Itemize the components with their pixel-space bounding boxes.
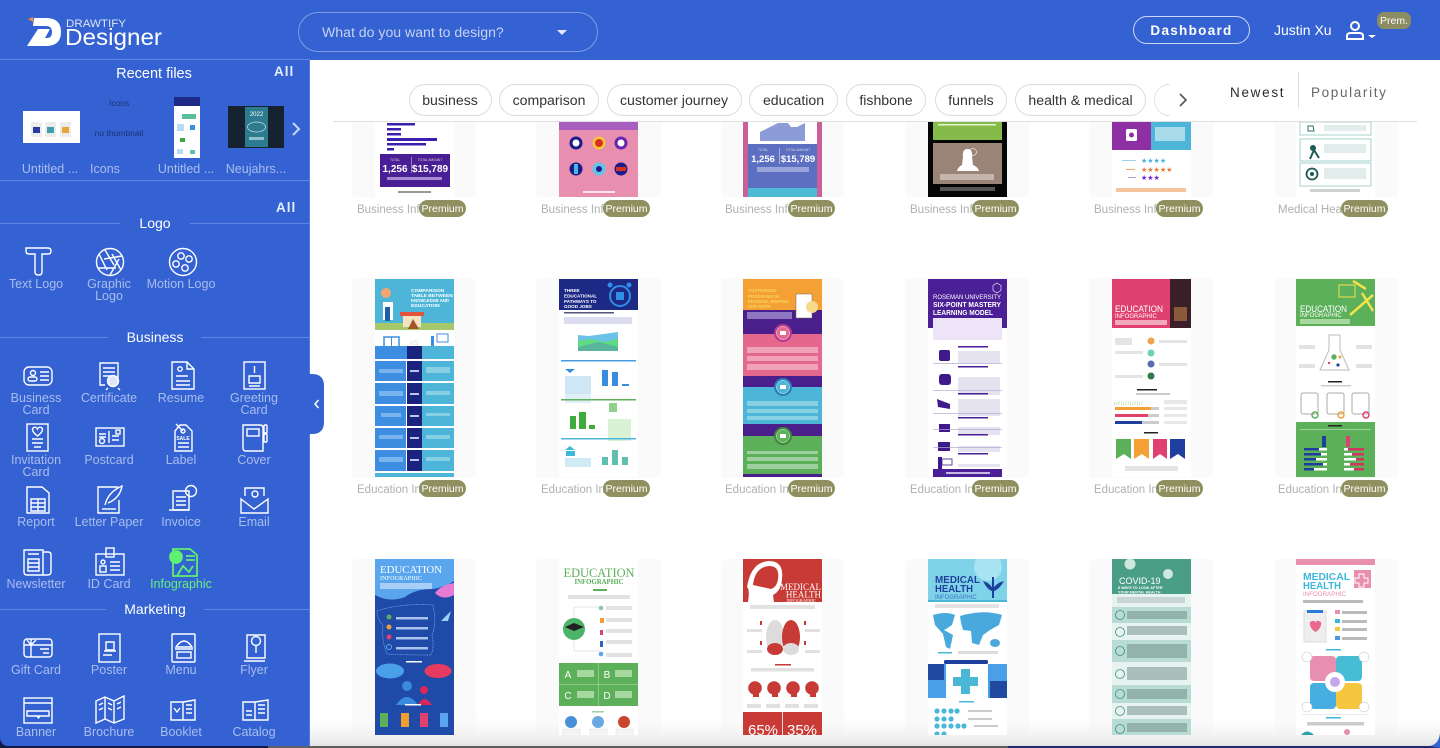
captions row 2: Premium: [605, 483, 648, 495]
thumbnail: comparison table: KNOWLEDGE AND: [411, 298, 449, 304]
tag pills: funnels: [948, 92, 994, 108]
icon: invoice: [169, 486, 196, 510]
thumbnail: medical health pink: HEALTH: [1303, 581, 1341, 592]
search box: [298, 12, 598, 52]
premium badge: Prem.: [1380, 15, 1408, 27]
captions row 1: [357, 200, 1388, 217]
label: booklet: Booklet: [160, 725, 202, 739]
captions row 1: Business Info: [357, 204, 426, 216]
thumbnail: business bars: TOTAL: [390, 158, 400, 162]
thumbnail: comparison table: [375, 279, 454, 477]
label: resume: Resume: [158, 391, 204, 405]
thumbnail: education infographic pink: INFOGRAPHIC: [1115, 314, 1157, 320]
captions row 2: Education In: [357, 484, 421, 496]
sort options: [1230, 72, 1388, 108]
thumbnail: comparison table: EDUCATION: [411, 303, 440, 309]
thumbnail: education infographic green on white: D: [603, 691, 611, 702]
bottom fade: [310, 713, 1440, 746]
label: sale tag text: SALE: [176, 436, 190, 442]
icon: postcard: [96, 428, 124, 446]
thumbnail: three pathways: GOOD JOBS: [564, 304, 592, 309]
thumbnail: education infographic pink: /////////////: [1114, 401, 1144, 406]
tag pills: business: [422, 92, 478, 108]
captions row 1: Premium: [1158, 203, 1201, 215]
tag pills: education: [763, 92, 824, 108]
label: infographic: Infographic: [150, 577, 212, 591]
thumbnail: medical health pink: [1296, 559, 1375, 735]
thumbnail: education infographic green on white: B: [604, 670, 611, 681]
icon: booklet: [171, 700, 195, 720]
dashboard button: [1134, 16, 1250, 44]
tag pills: fishbone: [859, 92, 913, 108]
captions row 1: Business Info: [910, 204, 979, 216]
label: business card: Business: [11, 391, 61, 405]
recent thumb 1: [23, 111, 80, 143]
thumbnail: education infographic green: [1296, 279, 1375, 477]
captions row 2: Premium: [1158, 483, 1201, 495]
thumbnail: black and brown: [928, 122, 1007, 197]
thumbnail: blue totals: TOTAL: [758, 148, 768, 152]
icon: motion logo: [170, 248, 196, 276]
icon: user: [1347, 22, 1376, 39]
label: invoice: Invoice: [161, 515, 201, 529]
thumbnail: comparison table: TABLE BETWEEN: [411, 293, 453, 299]
captions row 1: Premium: [421, 203, 464, 215]
thumbnail: medical health red: HEALTH: [786, 590, 821, 600]
thumbnail: blue totals: $15,789: [781, 154, 815, 165]
thumbnail: medical health red: 65%: [748, 722, 778, 739]
thumbnail: education infographic navy: [375, 559, 454, 735]
panel: template gallery row 3: [375, 553, 1375, 739]
thumbnail: medical health red: INFOGRAPHIC: [786, 598, 816, 603]
label: flyer: Flyer: [240, 663, 268, 677]
thumbnail: Roseman University: LEARNING MODEL: [933, 308, 994, 317]
icon: menu: [172, 634, 195, 662]
captions row 1: Premium: [790, 203, 833, 215]
thumbnail: medical health pink: INFOGRAPHIC: [1303, 591, 1347, 598]
thumbnail: blue totals: [743, 122, 822, 197]
thumbnail: customized programs: CUSTOMIZED: [748, 288, 776, 293]
captions row 2: Premium: [421, 483, 464, 495]
thumbnail: education infographic green on white: C: [564, 691, 572, 702]
section: business: [0, 329, 309, 591]
label: poster: Poster: [91, 663, 127, 677]
label: brochure: Brochure: [84, 725, 134, 739]
thumbnail: shopping stars: ★★★★: [1141, 157, 1166, 165]
thumbnail: covid-19: 8 WAYS TO LOOK AFTER: [1118, 586, 1163, 590]
thumbnail: three pathways: EDUCATIONAL: [564, 294, 597, 298]
recent captions: Neujahrs...: [226, 162, 286, 176]
thumbnail: medical health red: [743, 559, 822, 739]
logo: Designer: [65, 24, 162, 50]
recent captions: Untitled ...: [158, 162, 214, 176]
thumbnail: education infographic navy: INFOGRAPHIC: [380, 576, 422, 582]
recent thumb 2 placeholder: no thumbnail: [95, 128, 143, 138]
thumbnail: education infographic green on white: A: [565, 670, 572, 681]
recent thumb 4: 2022: [250, 112, 264, 118]
label: email: Email: [238, 515, 270, 529]
thumbnail: covid-19: YOUR MENTAL HEALTH: [1118, 590, 1161, 594]
icon: text logo: [26, 248, 51, 275]
panel: template gallery row 1: [380, 122, 1372, 197]
captions row 2: Education In: [910, 484, 974, 496]
recent files section: [0, 64, 309, 181]
thumbnail: business bars: 1,256: [382, 164, 408, 175]
row 3 card backgrounds: [352, 559, 1398, 735]
thumbnail: education infographic green on white: EDUCATION: [564, 566, 634, 580]
thumbnail: covid-19: COVID-19: [1119, 576, 1161, 586]
label: letter paper: Letter Paper: [75, 515, 143, 529]
thumbnail: education infographic green on white: [559, 559, 638, 737]
tag pills: comparison: [513, 92, 585, 108]
thumbnail: customized programs: PROGRAMS IN: [748, 294, 779, 299]
sort options: Popularity: [1311, 85, 1388, 100]
recent captions: [22, 162, 286, 176]
label: id card: ID Card: [87, 577, 131, 591]
tag pills: health & medical: [1028, 92, 1133, 108]
icon: report: [27, 487, 49, 513]
arrow: next recent: [293, 123, 299, 135]
thumbnail: three pathways: THREE: [564, 288, 580, 293]
window bottom edge: [0, 733, 1440, 748]
section: logo: Logo: [139, 215, 171, 231]
label: newsletter: Newsletter: [6, 577, 66, 591]
thumbnail: three pathways: PATHWAYS TO: [564, 299, 597, 304]
user name: Justin Xu: [1274, 22, 1332, 38]
label: label: Label: [166, 453, 196, 467]
label: certificate: Certificate: [81, 391, 137, 405]
icon: email: [241, 488, 268, 513]
recent thumb 2 placeholder: Icons: [109, 98, 129, 108]
captions row 2: [357, 480, 1388, 497]
thumbnail: shopping stars: [1112, 122, 1191, 197]
label: greeting card: Card: [240, 403, 268, 417]
thumbnail: blue totals: 1,256: [751, 154, 775, 165]
thumbnail: three pathways: [559, 279, 638, 477]
label: graphic logo: Logo: [95, 289, 123, 303]
label: menu: Menu: [165, 663, 197, 677]
thumbnail: medical health world map: [928, 553, 1007, 737]
label: business card: Card: [22, 403, 50, 417]
label: gift card: Gift Card: [11, 663, 61, 677]
captions row 2: Premium: [1343, 483, 1386, 495]
captions row 2: Premium: [974, 483, 1017, 495]
thumbnail: shopping stars: ★★★★★: [1141, 166, 1172, 174]
thumbnail: customized programs: AND MATH: [748, 304, 771, 309]
thumbnail: medical health world map: INFOGRAPHIC: [935, 595, 977, 601]
icon: infographic: [170, 549, 197, 576]
thumbnail: pink icon grid: [559, 122, 638, 197]
premium badge: [1377, 12, 1411, 29]
thumbnail: customized programs: [743, 279, 822, 477]
label: graphic logo: Graphic: [87, 277, 131, 291]
panel: top header: [0, 0, 1440, 60]
thumbnail: education infographic green: EDUCATION: [1300, 304, 1347, 314]
captions row 2: Premium: [790, 483, 833, 495]
icon: newsletter: [24, 550, 51, 575]
icon: id card: [96, 548, 124, 575]
logo: DRAWTIFY: [66, 18, 127, 30]
recent files section: Recent files: [116, 66, 192, 82]
search box: What do you want to design?: [322, 24, 504, 40]
recent thumb 2 placeholder: [95, 98, 143, 138]
thumbnail: Roseman University: SIX-POINT MASTERY: [933, 300, 1001, 309]
thumbnail: Roseman University: [928, 279, 1007, 477]
captions row 2: Education In: [1278, 484, 1342, 496]
thumbnail: shopping stars: ★★★: [1141, 174, 1160, 182]
section: logo: All: [276, 200, 296, 215]
dashboard button: Dashboard: [1150, 23, 1233, 38]
thumbnail: medical health red: 35%: [787, 722, 817, 739]
label: banner: Banner: [16, 725, 56, 739]
icon: graphic logo: [96, 248, 124, 276]
thumbnail: comparison table: COMPARISON: [411, 288, 445, 294]
panel: filter bar: [310, 60, 1440, 122]
section: marketing: [0, 601, 309, 739]
tag pills: customer journey: [620, 92, 729, 108]
sort options: Newest: [1230, 85, 1285, 100]
label: text logo: Text Logo: [9, 277, 63, 291]
section: business: Business: [127, 329, 183, 345]
thumbnail: business bars: $15,789: [412, 164, 449, 175]
thumbnail: education infographic pink: EDUCATION: [1115, 304, 1163, 314]
captions row 2: Education In: [1094, 484, 1158, 496]
label: postcard: Postcard: [84, 453, 134, 467]
icon: resume: [172, 362, 194, 389]
label: invitation card: Card: [22, 465, 50, 479]
tag pills: [410, 84, 1170, 116]
captions row 1: Medical Heal: [1278, 204, 1344, 216]
label: catalog: Catalog: [232, 725, 276, 739]
icon: letter paper: [98, 486, 122, 513]
section: logo: [0, 200, 309, 303]
captions row 1: Business Info: [1094, 204, 1163, 216]
icon: poster: [99, 634, 120, 662]
recent captions: Untitled ...: [22, 162, 78, 176]
label: motion logo: Motion Logo: [147, 277, 215, 291]
icon: greeting card: [244, 362, 265, 389]
panel: sidebar: [0, 60, 310, 748]
captions row 2: Education In: [725, 484, 789, 496]
thumbnail: medical health world map: MEDICAL: [935, 575, 980, 586]
thumbnail: education infographic green: INFOGRAPHIC: [1300, 313, 1342, 319]
captions row 2: Education In: [541, 484, 605, 496]
captions row 1: Premium: [974, 203, 1017, 215]
captions row 1: Premium: [605, 203, 648, 215]
captions row 1: Business Info: [725, 204, 794, 216]
icon: brochure: [96, 696, 124, 723]
thumbnail: blue totals: TOTAL AMOUNT: [786, 148, 810, 152]
recent files section: All: [274, 64, 294, 79]
thumbnail: medical list: [1300, 122, 1372, 192]
icon: business card: [24, 367, 52, 385]
thumbnail: Roseman University: ROSEMAN UNIVERSITY: [933, 294, 1002, 301]
icon: invitation card: [27, 424, 48, 451]
thumbnail: education infographic green on white: INFOGRAPHIC: [574, 579, 624, 586]
thumbnail: comparison table: VS: [409, 340, 419, 347]
icon: cover: [243, 425, 267, 451]
recent thumb 3: [174, 97, 200, 158]
label: invitation card: Invitation: [11, 453, 61, 467]
captions row 1: Premium: [1343, 203, 1386, 215]
sidebar collapse tab: [309, 374, 324, 434]
thumbnail: business bars: TOTAL AMOUNT: [418, 158, 442, 162]
recent thumb 4: [228, 106, 284, 148]
icon: certificate: [100, 363, 120, 390]
captions row 1: Business Info: [541, 204, 610, 216]
panel: template gallery row 2: [352, 278, 1398, 478]
label: cover: Cover: [237, 453, 271, 467]
label: report: Report: [17, 515, 55, 529]
logo: [27, 17, 162, 50]
arrow: next tags: [1180, 94, 1186, 106]
icon: banner: [24, 698, 52, 723]
thumbnail: covid-19: [1112, 558, 1191, 735]
thumbnail: medical health red: MEDICAL: [780, 582, 821, 592]
thumbnail: medical health pink: MEDICAL: [1303, 572, 1350, 583]
icon: catalog: [243, 700, 268, 720]
thumbnail: education infographic navy: EDUCATION: [380, 565, 442, 576]
recent captions: Icons: [90, 162, 120, 176]
icon: label: [175, 424, 192, 451]
thumbnail: customized programs: READING, WRITING: [748, 299, 789, 304]
label: greeting card: Greeting: [230, 391, 278, 405]
thumbnail: medical health world map: HEALTH: [935, 584, 973, 595]
icon: gift card: [24, 639, 52, 657]
thumbnail: business bars: [380, 123, 450, 193]
section: marketing: Marketing: [124, 601, 186, 617]
icon: flyer: [244, 635, 265, 661]
thumbnail: education infographic pink: [1112, 279, 1191, 477]
